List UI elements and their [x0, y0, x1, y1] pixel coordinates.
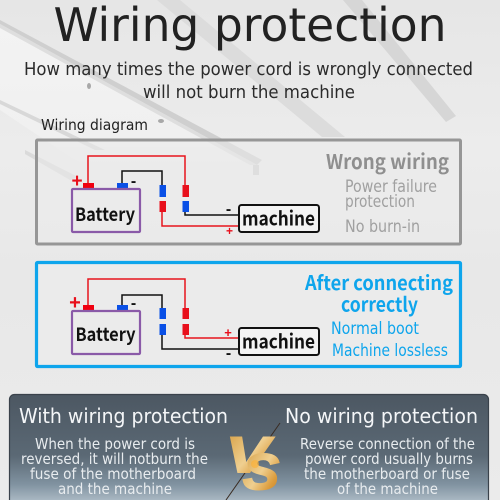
polarity marks: -	[131, 173, 136, 190]
wrong wiring text	[326, 145, 449, 236]
wiring diagram heading: Wiring diagram	[41, 116, 148, 134]
VS emblem: S	[243, 444, 279, 500]
with protection description: reversed, it will notburn the	[21, 450, 208, 468]
polarity marks	[69, 292, 232, 362]
with protection description: and the machine	[58, 480, 172, 498]
polarity marks: +	[226, 224, 233, 238]
panel: wrong wiring	[36, 140, 460, 244]
wrong wiring text: Wrong wiring	[326, 145, 449, 175]
subtitle: will not burn the machine	[143, 82, 355, 103]
no protection description	[300, 435, 475, 498]
polarity marks: -	[226, 345, 231, 362]
wires	[88, 279, 239, 349]
correct wiring text	[304, 267, 453, 360]
battery	[72, 189, 140, 232]
machine: machine	[242, 202, 315, 232]
panel: correct wiring	[36, 262, 460, 366]
battery: Battery	[76, 321, 136, 347]
polarity marks: +	[69, 292, 81, 314]
polarity marks: -	[131, 295, 136, 312]
wrong wiring text: Power failure	[345, 177, 437, 196]
subtitle	[24, 59, 473, 103]
wires	[88, 156, 239, 226]
wrong wiring text: No burn-in	[345, 217, 420, 236]
connectors and terminals	[83, 183, 189, 212]
subtitle: How many times the power cord is wrongly connected	[24, 59, 473, 80]
correct wiring text: Normal boot	[331, 319, 419, 338]
with protection description: fuse of the motherboard	[30, 465, 196, 483]
connectors and terminals	[83, 305, 189, 335]
no protection description: the motherboard or fuse	[304, 465, 470, 483]
polarity marks: -	[226, 201, 231, 218]
polarity marks: +	[224, 325, 232, 340]
polarity marks	[71, 171, 233, 238]
with wiring protection heading: With wiring protection	[19, 404, 228, 428]
no protection description: Reverse connection of the	[300, 435, 475, 453]
VS emblem	[226, 423, 280, 500]
no protection description: power cord usually burns	[305, 450, 473, 468]
VS emblem: V	[226, 427, 274, 483]
correct wiring text: Machine lossless	[332, 341, 448, 360]
panel: comparison	[10, 394, 488, 500]
correct wiring text: After connecting	[304, 267, 453, 296]
with protection description	[21, 435, 208, 498]
correct wiring text: correctly	[341, 288, 418, 318]
battery: Battery	[75, 201, 135, 227]
machine: machine	[242, 326, 315, 354]
wrong wiring text: protection	[345, 192, 415, 211]
battery	[72, 311, 140, 354]
polarity marks: +	[71, 171, 83, 192]
no wiring protection heading: No wiring protection	[285, 404, 478, 428]
no protection description: of the machine	[337, 480, 438, 498]
with protection description: When the power cord is	[35, 435, 195, 453]
